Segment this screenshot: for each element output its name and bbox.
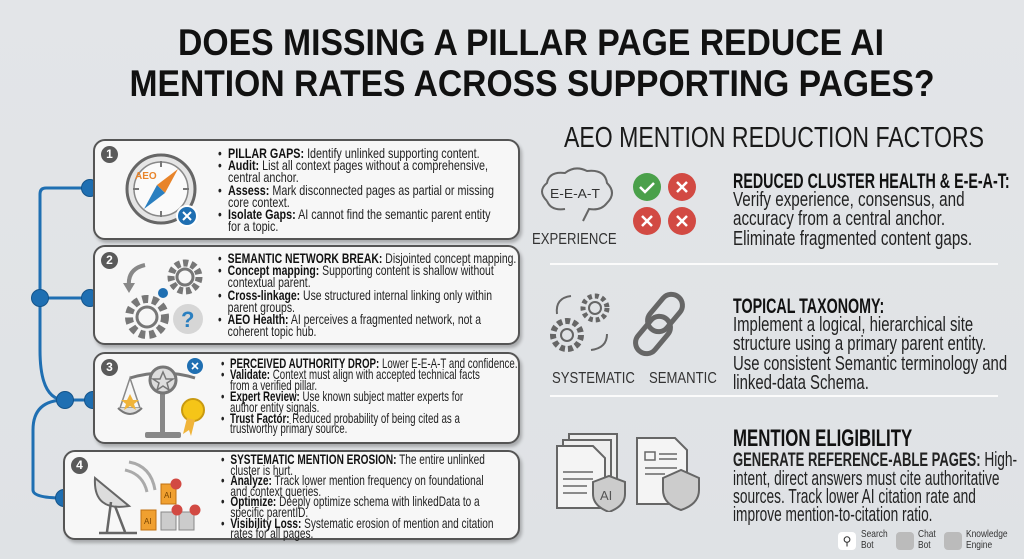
panel 2: semantic network break: [93, 245, 520, 345]
label: experience: EXPERIENCE: [532, 231, 617, 248]
label: semantic: SEMANTIC: [649, 370, 717, 387]
title: [130, 22, 934, 104]
title: MENTION RATES ACROSS SUPPORTING PAGES?: [130, 63, 934, 104]
factor 2: taxonomy icons: [550, 292, 685, 356]
connector dots: [31, 179, 93, 507]
text: authority: trustworthy primary source.: [230, 420, 347, 436]
icon: scales: [117, 358, 205, 438]
icon: AI docs: AI: [600, 488, 612, 503]
text: semantic: SEMANTIC NETWORK BREAK: Disjointed concept mapping.: [228, 250, 516, 266]
text: pillar gaps: [218, 145, 494, 234]
icon: satellite dish with AI docs: [94, 460, 200, 534]
panel 2: semantic network break: 2: [106, 253, 113, 267]
text: pillar gaps: for a topic.: [228, 218, 278, 234]
text: erosion: cluster is hurt.: [230, 462, 293, 478]
panel 4: mention erosion: [63, 450, 520, 540]
panel 1: pillar gaps: [93, 139, 520, 240]
text: authority: [221, 355, 518, 436]
text: semantic: Concept mapping: Supporting content is shallow without: [228, 262, 494, 278]
text: semantic: AEO Health: AI perceives a fragmented network, not a: [228, 311, 481, 327]
text: pillar gaps: Assess: Mark disconnected pages as partial or missing: [228, 182, 494, 198]
text: erosion: rates for all pages.: [230, 525, 313, 541]
text: taxonomy: [733, 314, 1007, 394]
text: eligibility: sources. Track lower AI citation rate and: [733, 486, 976, 508]
panel 4: mention erosion: 4: [76, 458, 83, 472]
heading: cluster health: REDUCED CLUSTER HEALTH & E-E-A-T:: [733, 170, 1010, 193]
icon: satellite dish with AI docs: AI: [164, 491, 172, 500]
legend: bots: ⚲: [843, 534, 851, 548]
text: semantic: coherent topic hub.: [228, 323, 316, 339]
text: authority: Expert Review: Use known subject matter experts for: [230, 388, 463, 404]
text: pillar gaps: Audit: List all context pages without a comprehensive,: [228, 157, 488, 173]
icon: compass: [126, 154, 196, 225]
heading: eligibility: MENTION ELIGIBILITY: [733, 425, 912, 452]
panel 1: pillar gaps: 1: [106, 147, 113, 161]
text: authority: from a verified pillar.: [230, 377, 317, 393]
icon: brain EEAT: E-E-A-T: [550, 186, 600, 201]
legend: bots: Search: [861, 528, 888, 540]
icon: systematic gears: [550, 294, 610, 352]
text: eligibility: [733, 449, 1017, 526]
text: pillar gaps: central anchor.: [228, 169, 299, 185]
text: erosion: SYSTEMATIC MENTION EROSION: The entire unlinked: [230, 451, 485, 467]
text: cluster health: [733, 189, 972, 250]
text: taxonomy: linked-data Schema.: [733, 372, 869, 394]
text: taxonomy: Implement a logical, hierarchical site: [733, 314, 973, 336]
text: semantic: [218, 250, 516, 339]
text: cluster health: Eliminate fragmented content gaps.: [733, 228, 972, 250]
connector lines: [32, 186, 84, 500]
text: semantic: parent groups.: [228, 299, 295, 315]
text: authority: Validate: Context must align with accepted technical facts: [230, 366, 480, 382]
text: taxonomy: structure using a primary parent entity.: [733, 333, 986, 355]
legend: bots: Bot: [861, 539, 874, 551]
text: taxonomy: Use consistent Semantic terminology and: [733, 353, 1007, 375]
text: semantic: Cross-linkage: Use structured internal linking only within: [228, 287, 492, 303]
text: authority: Trust Factor: Reduced probability of being cited as a: [230, 410, 460, 426]
text: erosion: Analyze: Track lower mention frequency on foundational: [230, 472, 484, 488]
panel 3: authority drop: [93, 352, 520, 444]
text: pillar gaps: PILLAR GAPS: Identify unlinked supporting content.: [228, 145, 480, 161]
text: authority: PERCEIVED AUTHORITY DROP: Lower E-E-A-T and confidence.: [230, 355, 518, 371]
factor 3: document icons: [556, 433, 700, 512]
text: erosion: Visibility Loss: Systematic erosion of mention and citation: [230, 515, 493, 531]
factor 1: cluster health: [532, 167, 696, 248]
text: authority: author entity signals.: [230, 399, 319, 415]
text: erosion: and context queries.: [230, 483, 321, 499]
text: cluster health: Verify experience, consensus, and: [733, 189, 965, 211]
text: cluster health: accuracy from a central anchor.: [733, 208, 945, 230]
text: erosion: [221, 451, 493, 541]
heading: taxonomy: TOPICAL TAXONOMY:: [733, 295, 884, 318]
icon: doc shield: [636, 437, 700, 511]
text: eligibility: intent, direct answers must cite authoritative: [733, 468, 1000, 490]
legend: bots: Engine: [966, 539, 992, 551]
icon: satellite dish with AI docs: AI: [144, 517, 152, 526]
icon: gears: [123, 260, 203, 339]
text: erosion: specific parentID.: [230, 504, 308, 520]
text: semantic: contextual parent.: [228, 274, 311, 290]
icon: check and crosses: [633, 173, 696, 235]
text: eligibility: GENERATE REFERENCE-ABLE PAGES: High-: [733, 449, 1017, 471]
legend: bots: Knowledge: [966, 528, 1008, 540]
panel 3: authority drop: 3: [106, 360, 113, 374]
legend: bots: Bot: [918, 539, 931, 551]
text: pillar gaps: Isolate Gaps: AI cannot find the semantic parent entity: [228, 206, 490, 222]
icon: compass: AEO: [135, 171, 157, 182]
icon: brain EEAT: [541, 167, 613, 222]
text: erosion: Optimize: Deeply optimize schema with linkedData to a: [230, 493, 480, 509]
legend: bots: [838, 528, 1008, 551]
text: pillar gaps: core context.: [228, 194, 290, 210]
icon: semantic chain: [633, 292, 685, 356]
icon: AI docs: [556, 433, 626, 512]
title: DOES MISSING A PILLAR PAGE REDUCE AI: [178, 22, 884, 63]
legend: bots: Chat: [918, 528, 936, 540]
text: eligibility: improve mention-to-citation ratio.: [733, 504, 932, 526]
icon: gears: ?: [181, 307, 194, 332]
label: systematic: SYSTEMATIC: [552, 370, 635, 387]
